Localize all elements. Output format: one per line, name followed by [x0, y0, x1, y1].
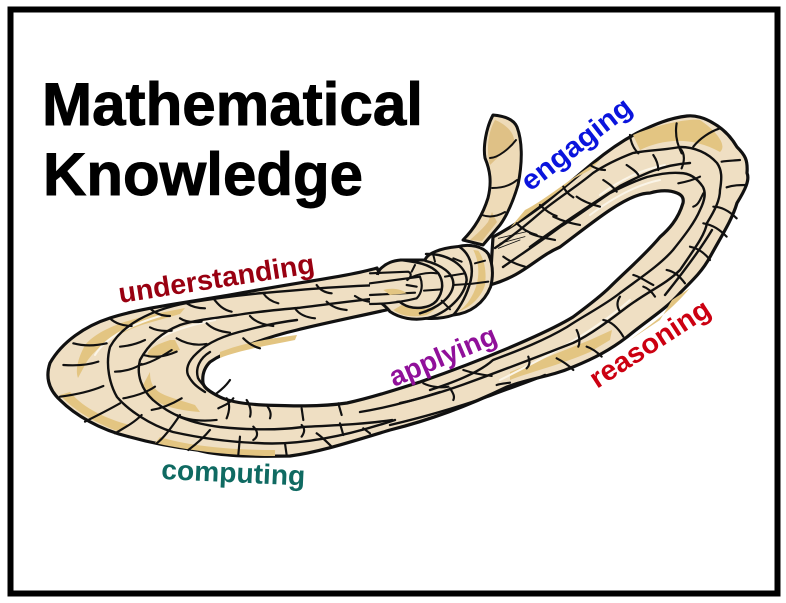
rope strands — [108, 147, 721, 443]
label: reasoning: reasoning — [583, 293, 716, 394]
title — [42, 71, 423, 208]
rope knot — [370, 245, 493, 319]
label: computing: computing — [161, 454, 306, 492]
rope tail — [463, 115, 521, 245]
title: Knowledge — [43, 141, 363, 208]
label: engaging: engaging — [515, 91, 638, 197]
tan shading on rope — [60, 120, 722, 456]
rope body — [48, 116, 748, 456]
label: applying: applying — [384, 319, 501, 393]
label: understanding: understanding — [116, 248, 317, 309]
illustration: rope with knot — [48, 115, 748, 456]
rope cross ticks left — [60, 285, 372, 455]
rope cross ticks right — [423, 123, 747, 400]
rope highlights — [95, 165, 665, 380]
title: Mathematical — [42, 71, 423, 138]
